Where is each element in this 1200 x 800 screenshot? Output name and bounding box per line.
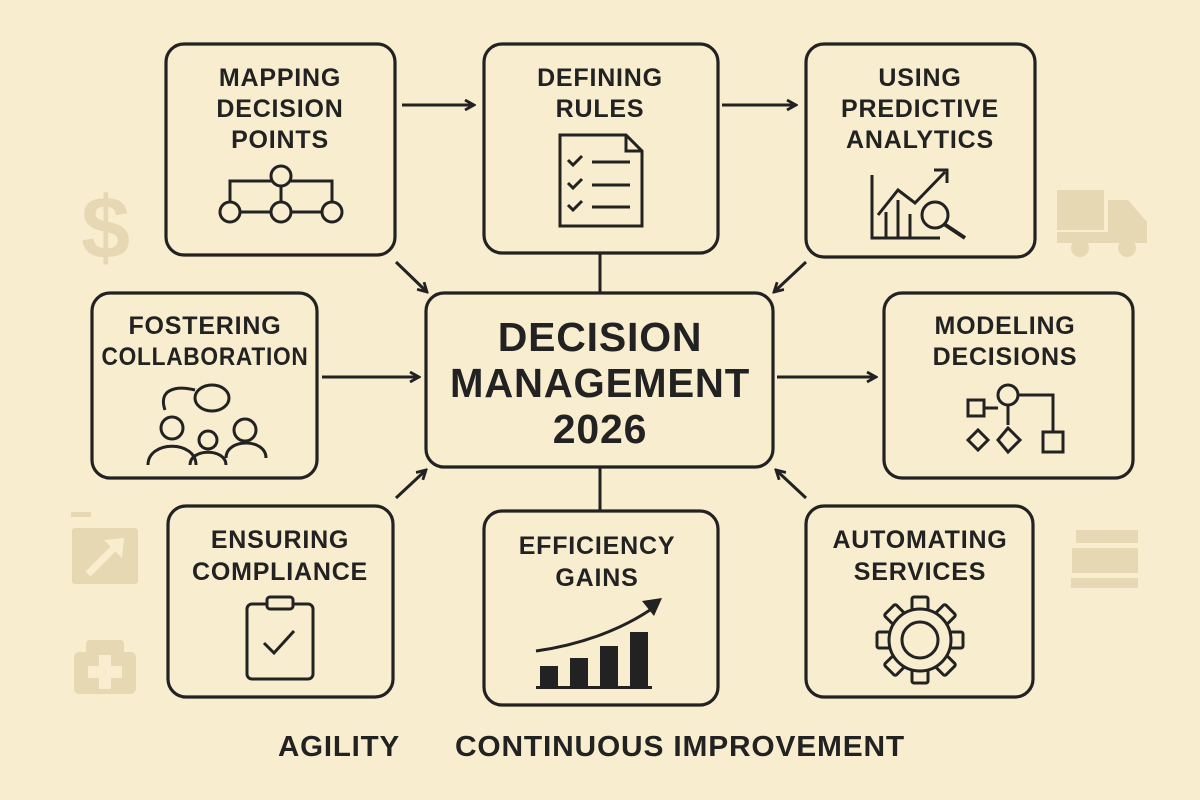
- panel: ensuring compliance: COMPLIANCE: [192, 558, 368, 586]
- panel: defining rules: [484, 44, 718, 253]
- panel: automating services: [806, 506, 1033, 697]
- icon: people with speech: [148, 385, 266, 465]
- panel: fostering collaboration: FOSTERING: [128, 312, 282, 340]
- icon: decision diagram: [968, 385, 1063, 452]
- panel: ensuring compliance: [168, 506, 393, 697]
- panel: center decision management 2026: DECISION: [498, 314, 702, 360]
- panel: modeling decisions: DECISIONS: [933, 343, 1077, 371]
- background icon: dollar: $: [81, 178, 131, 277]
- panel: modeling decisions: [884, 293, 1133, 478]
- panel: automating services: AUTOMATING: [832, 526, 1008, 554]
- panel: center decision management 2026: 2026: [553, 406, 647, 452]
- icon: checklist document: [560, 135, 642, 226]
- panel: using predictive analytics: [806, 44, 1035, 257]
- footer label: continuous improvement: CONTINUOUS IMPROVEMENT: [455, 731, 905, 763]
- panel: fostering collaboration: [92, 293, 317, 478]
- panel: center decision management 2026: [426, 293, 773, 467]
- panel: fostering collaboration: COLLABORATION: [102, 343, 308, 371]
- panel: mapping decision points: MAPPING: [219, 64, 341, 92]
- panel: efficiency gains: GAINS: [555, 564, 639, 592]
- panel: automating services: SERVICES: [854, 558, 986, 586]
- panel: mapping decision points: [166, 44, 395, 255]
- panel: using predictive analytics: USING: [878, 64, 962, 92]
- background icon: truck: [1057, 190, 1147, 257]
- panel: center decision management 2026: MANAGEMENT: [450, 360, 750, 406]
- background icon: folder arrow: [71, 512, 138, 584]
- icon: gear: [877, 597, 963, 683]
- panel: ensuring compliance: ENSURING: [211, 526, 349, 554]
- connectors: [322, 105, 876, 510]
- footer label: agility: AGILITY: [278, 731, 400, 763]
- background icon: medical kit: [74, 640, 136, 694]
- panel: mapping decision points: DECISION: [216, 95, 344, 123]
- panel: defining rules: DEFINING: [537, 64, 663, 92]
- panel: efficiency gains: EFFICIENCY: [519, 532, 675, 560]
- icon: flow nodes: [220, 166, 342, 222]
- panel: using predictive analytics: PREDICTIVE: [841, 95, 999, 123]
- panel: mapping decision points: POINTS: [231, 126, 329, 154]
- background icon: stacked lines: [1071, 530, 1138, 588]
- panel: using predictive analytics: ANALYTICS: [846, 126, 994, 154]
- icon: chart with magnifier: [872, 170, 965, 238]
- icon: clipboard check: [247, 597, 313, 679]
- panel: defining rules: RULES: [556, 95, 644, 123]
- icon: bar chart with arrow: [536, 598, 662, 689]
- panel: modeling decisions: MODELING: [934, 312, 1076, 340]
- panel: efficiency gains: [484, 511, 718, 705]
